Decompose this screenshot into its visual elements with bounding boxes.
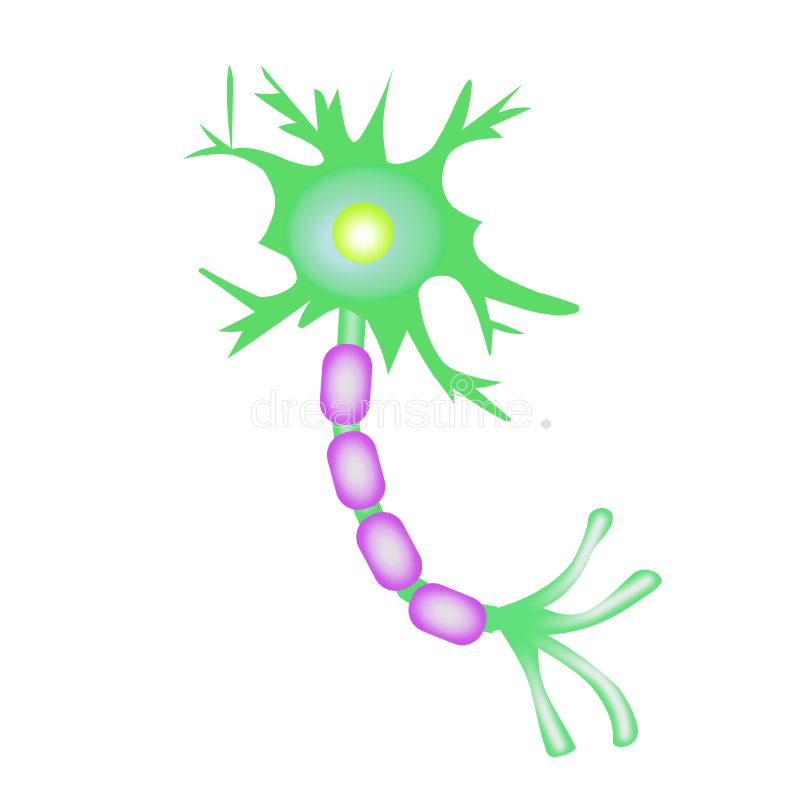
axon [346,305,495,620]
soma [285,163,448,303]
watermark: dreamstime [249,382,534,438]
nucleus [332,202,394,264]
myelin sheath 4 [401,576,493,652]
axon terminal [485,508,662,757]
myelin sheath 2 [322,426,391,515]
myelin sheath 1 [318,342,374,427]
cell body with dendrites [183,65,579,421]
myelin sheath 3 [348,504,430,599]
neuron infographic [183,65,662,757]
